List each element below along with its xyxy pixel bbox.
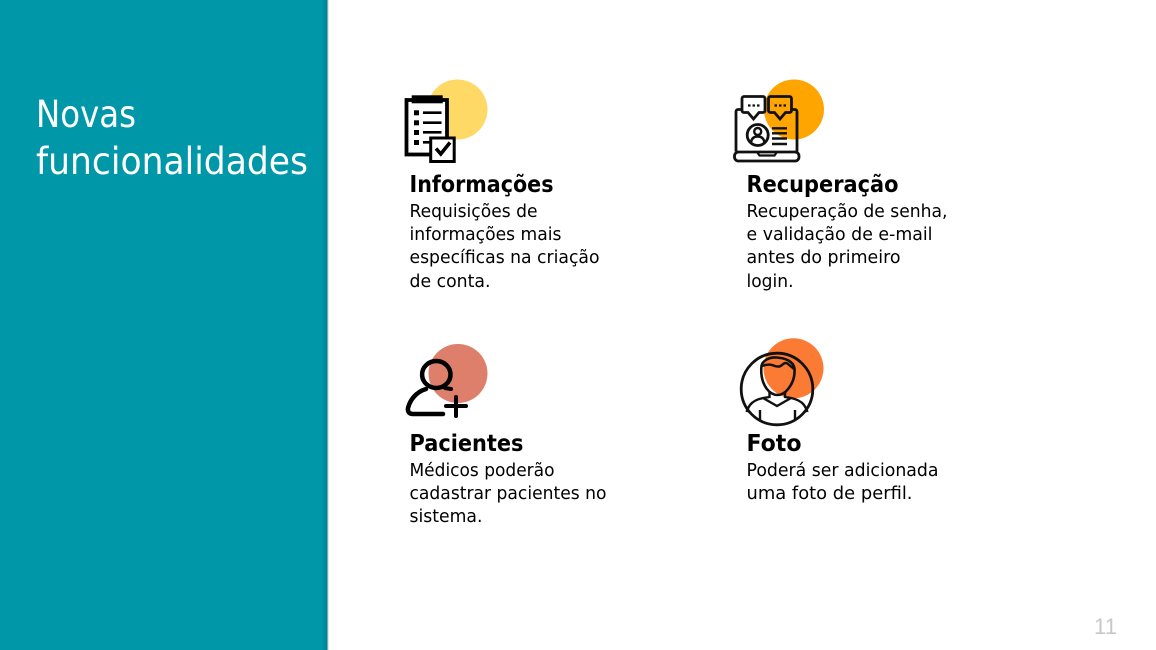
icon: add patient xyxy=(408,344,488,416)
text: Foto xyxy=(746,431,938,504)
page number: 11 xyxy=(1094,614,1117,639)
title: funcionalidades xyxy=(36,140,308,183)
text: Informações: específicas na criação xyxy=(410,247,600,268)
text: Informações xyxy=(410,172,600,292)
icon: profile photo xyxy=(741,338,824,425)
text: Foto: Foto xyxy=(746,431,802,457)
text: Recuperação: Recuperação xyxy=(746,172,898,198)
title: Novas xyxy=(36,93,136,136)
text: Foto: Poderá ser adicionada xyxy=(746,460,938,481)
text: Pacientes: cadastrar pacientes no xyxy=(410,483,606,504)
text: Informações: informações mais xyxy=(410,224,562,245)
text: Recuperação: e validação de e-mail xyxy=(746,224,932,245)
icon: clipboard with checklist xyxy=(406,80,488,162)
panel: teal sidebar xyxy=(0,0,329,650)
text: Informações: Requisições de xyxy=(410,201,538,222)
text: Informações: de conta. xyxy=(410,271,490,292)
text: Recuperação: login. xyxy=(746,271,794,292)
text: Pacientes: sistema. xyxy=(410,506,482,527)
text: Recuperação xyxy=(746,172,948,292)
text: Pacientes: Médicos poderão xyxy=(410,460,554,481)
text: Pacientes xyxy=(410,431,606,527)
text: Informações: Informações xyxy=(410,172,554,198)
text: Pacientes: Pacientes xyxy=(410,431,524,457)
title xyxy=(36,93,308,183)
text: Foto: uma foto de perfil. xyxy=(746,483,912,504)
text: Recuperação: antes do primeiro xyxy=(746,247,900,268)
text: Recuperação: Recuperação de senha, xyxy=(746,201,948,222)
icon: laptop with chat bubbles xyxy=(734,80,824,161)
